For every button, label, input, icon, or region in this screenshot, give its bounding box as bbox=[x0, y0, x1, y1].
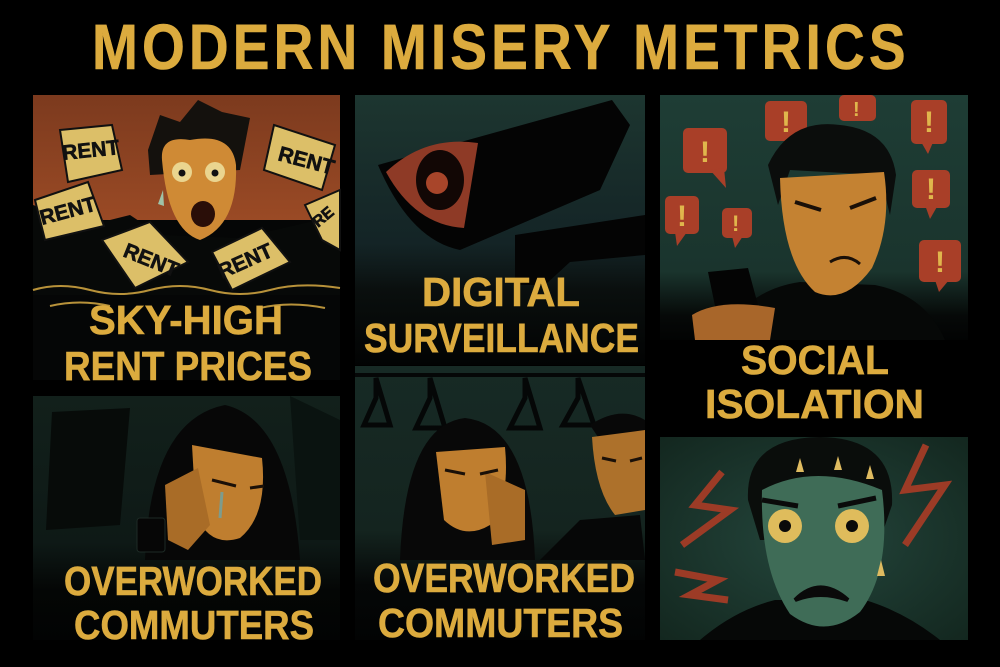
icon: crying commuter bbox=[400, 418, 535, 560]
icon: security camera bbox=[378, 100, 645, 285]
caption: DIGITAL bbox=[422, 269, 580, 315]
panel: social isolation: ! bbox=[926, 173, 936, 206]
caption: RENT PRICES bbox=[64, 343, 312, 389]
panel: overworked commuters left bbox=[33, 396, 340, 648]
caption bbox=[64, 297, 312, 389]
panel: digital surveillance bbox=[355, 95, 645, 365]
panel: overworked commuters center bbox=[355, 366, 645, 646]
icon: alert speech bubbles bbox=[665, 95, 961, 292]
panel: sky-high rent prices: RENT bbox=[37, 193, 99, 230]
panel: sky-high rent prices: RENT bbox=[276, 143, 337, 180]
caption: ISOLATION bbox=[705, 381, 924, 427]
panel: social isolation: ! bbox=[924, 106, 934, 139]
caption: COMMUTERS bbox=[74, 602, 314, 648]
panel: sky-high rent prices bbox=[33, 95, 340, 389]
caption: OVERWORKED bbox=[64, 558, 322, 604]
rent notes bbox=[35, 125, 340, 290]
panel: anxious man bbox=[660, 437, 968, 640]
caption bbox=[64, 558, 322, 648]
panel: sky-high rent prices: RE bbox=[310, 204, 338, 231]
panel: social isolation: ! bbox=[677, 200, 687, 233]
caption bbox=[364, 269, 639, 361]
icon: hanging straps bbox=[364, 378, 594, 428]
panel: social isolation: ! bbox=[853, 99, 860, 121]
panel: social isolation: ! bbox=[700, 136, 710, 169]
panel: social isolation: ! bbox=[732, 211, 739, 236]
icon: crying woman bbox=[137, 405, 300, 560]
icon: man in suit bbox=[540, 414, 645, 560]
caption bbox=[373, 555, 635, 646]
caption: SOCIAL bbox=[741, 337, 889, 383]
caption bbox=[705, 337, 924, 427]
panel: sky-high rent prices: RENT bbox=[215, 239, 276, 284]
icon: man with phone bbox=[692, 124, 945, 340]
panel: sky-high rent prices: RENT bbox=[61, 136, 121, 165]
icon: red lightning bbox=[675, 445, 945, 600]
panel: sky-high rent prices: RENT bbox=[120, 239, 182, 282]
caption: SURVEILLANCE bbox=[364, 315, 639, 361]
panel: social isolation: ! bbox=[935, 246, 945, 279]
icon: panicked face bbox=[700, 437, 940, 640]
panel: social isolation: ! bbox=[781, 106, 791, 139]
icon: drowning man bbox=[148, 100, 250, 240]
panel: social isolation bbox=[660, 95, 968, 427]
title: MODERN MISERY METRICS bbox=[92, 11, 906, 83]
caption: OVERWORKED bbox=[373, 555, 635, 601]
water waves bbox=[33, 205, 340, 295]
caption: SKY-HIGH bbox=[89, 297, 283, 343]
caption: COMMUTERS bbox=[378, 600, 623, 646]
